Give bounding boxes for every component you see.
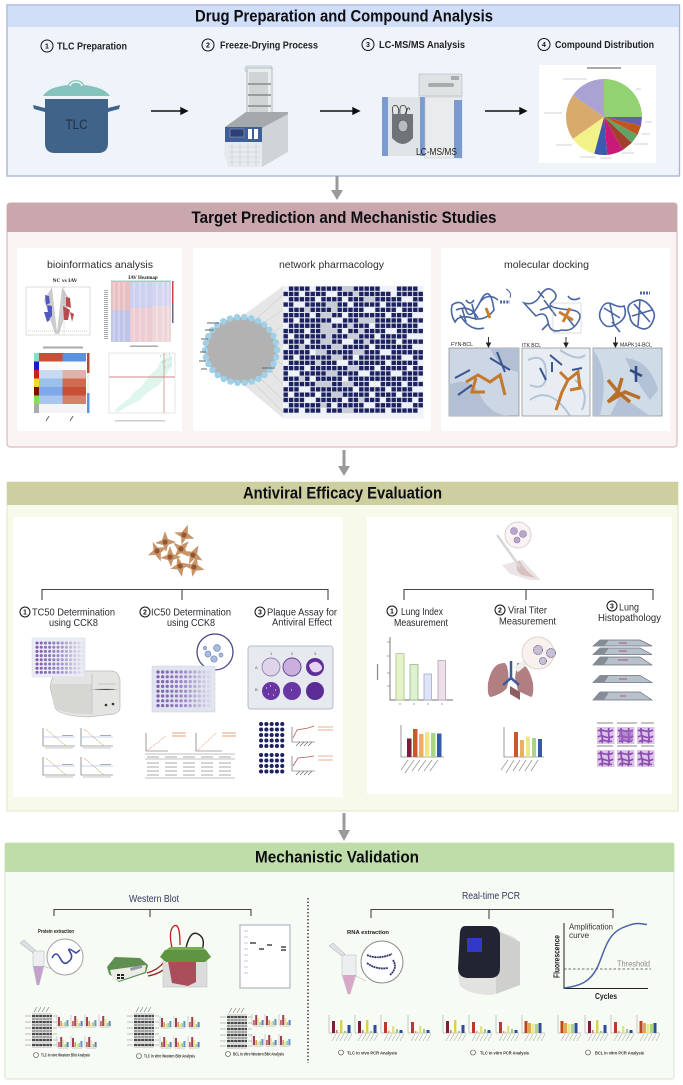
real-time PCR heading: Real-time PCR [462,891,520,902]
dotted divider [307,898,309,1063]
panel: target prediction and mechanistic studies [7,203,677,447]
label: viral titer [495,604,556,628]
card: molecular docking [441,248,670,431]
arrow: flow to antiviral efficacy [338,450,350,476]
step 4 label: Compound Distribution [555,40,654,51]
label: viral titer: Measurement [499,616,556,628]
bar chart: viral titer by group [501,727,544,773]
label: TC50: using CCK8 [49,617,98,629]
label: TC50: TC50 Determination [32,606,115,618]
volcano plot: NC vs IAV [53,278,78,284]
PCR group 3 [558,1015,660,1056]
heading: mechanistic validation: Mechanistic Validation [255,848,419,866]
protein extraction label: Protein extraction [38,929,74,935]
step 4 label [538,38,654,51]
step 3 label: 3 [366,42,370,49]
label: plaque assay [255,606,337,628]
icon: microplate reader [32,638,120,717]
label: IC50 [140,606,231,629]
docking arrows [486,337,618,347]
western blot heading: Western Blot [129,894,179,905]
chart: amplification curve: Fluorescence [552,935,562,978]
heading: target prediction: Target Prediction and Mechanistic Studies [192,209,496,227]
icon: plaque assay plate: 3 [314,651,317,656]
panel: mechanistic validation [5,843,674,1079]
PCR group 1 [329,1015,431,1056]
card: molecular docking: MAPK14-BCL [620,342,652,348]
bracket [371,910,613,919]
icon: plaque assay plate: 1 [270,651,273,656]
step 1 label [41,40,127,52]
bracket [404,590,653,600]
heatmap: IAV Heatmap [128,276,158,281]
step 2 label [202,39,318,52]
icon: electrophoresis power supply and tank [107,925,211,987]
PCR group 2: TLC in vitro PCR Analysis [480,1050,530,1056]
step 3 label: LC-MS/MS Analysis [379,40,465,51]
icon: lungs with virus inset [488,637,556,700]
PCR group 1: TLC in vivo PCR Analysis [347,1050,398,1056]
icon: protein tube [20,939,83,985]
western blot group 2: TLC in vitro Western Blot Analysis [144,1054,195,1058]
subheading: molecular docking [504,259,589,271]
plaque dot plates and dose curves [261,724,333,775]
label: lung index: Lung Index [401,606,444,618]
histology micrographs [597,723,654,767]
protein structure: FYN-BCL [451,289,510,329]
protein structure: MAPK14-BCL [600,293,654,332]
module-trait heatmap [34,346,90,421]
label: IC50: using CCK8 [167,617,215,629]
docking labels: FYN-BCL [451,342,473,348]
PCR group 2 [443,1015,545,1056]
western blot group 3: BCL in vitro Western Blot Analysis [233,1052,284,1056]
step 1 label: TLC Preparation [57,42,127,52]
pie chart: compound distribution [539,65,656,163]
bar chart: lung index by group [401,725,444,773]
TC50 line charts [43,728,113,777]
heading: drug preparation: Drug Preparation and Compound Analysis [195,8,493,26]
subheading: bioinformatics analysis [47,259,153,271]
label: TC50 [20,606,115,629]
arrow [485,108,526,114]
label: plaque assay: Plaque Assay for [267,606,337,618]
label: viral titer: Viral Titer [508,604,547,616]
RNA extraction label: RNA extraction [347,930,390,936]
icon: plaque assay plate: A [255,665,258,670]
card: in vitro assays [13,517,343,797]
arrow: flow to target prediction [331,176,343,200]
docking close-up: MAPK14-BCL [593,348,662,416]
arrow: flow to mechanistic validation [338,813,350,841]
icon: PCR machine [458,926,520,995]
icon: plaque assay plate [248,646,333,709]
icon: freeze dryer [224,66,288,167]
card: bioinformatics analysis [17,248,182,431]
panel: antiviral efficacy evaluation [7,482,678,811]
network fan and ring [199,286,283,418]
chart: amplification curve: Amplification [569,922,613,932]
icon: LC-MS/MS instrument: LC-MS/MS [416,147,457,158]
icon: RNA tube [329,941,403,994]
arrow [151,108,187,114]
chart: amplification curve: Threshold [617,960,650,968]
icon: cultured cells [144,521,208,580]
western blot group 3 [220,1008,291,1056]
card: network pharmacology [193,248,431,431]
label: lung index [387,606,448,629]
bar chart: lung index [378,637,453,704]
scatter plot [109,346,175,422]
label: viral titer: 2 [498,608,502,614]
step 2 label: 2 [206,42,210,50]
label: lung index: Measurement [394,617,448,629]
card: molecular docking: ITK BCL [522,343,541,349]
label: lung histopathology: 3 [610,604,614,610]
label: lung histopathology: Histopathology [598,612,662,624]
icon: plaque assay plate: 2 [291,651,294,656]
western blot group 1: TLC in vivo Western Blot Analysis [41,1052,90,1058]
PCR group 3: BCL in vitro PCR Analysis [595,1050,644,1056]
label: plaque assay: 3 [258,610,262,616]
icon: LC-MS/MS instrument [382,74,462,158]
chart: amplification curve: Cycles [595,992,617,1001]
icon: plaque assay plate: B [255,687,258,692]
step 3 label [362,38,465,51]
docking close-up: ITK-BCL [522,348,590,416]
step 4 label: 4 [542,42,546,49]
bracket [54,910,251,917]
subheading: network pharmacology [279,259,385,271]
western blot group 1 [25,1007,111,1058]
icon: TLC pot [33,80,120,153]
label: lung histopathology [598,601,662,624]
protein structure: ITK-BCL [524,289,581,333]
docking close-up: FYN-BCL [449,348,519,416]
western blot group 2 [127,1007,200,1058]
volcano plot [26,278,90,335]
heatmap [106,276,174,342]
step 2 label: Freeze-Drying Process [220,40,318,52]
icon: lung sampling with virus inset [497,522,541,580]
step 1 label: 1 [45,44,49,50]
chart: amplification curve [552,922,651,1001]
card: in vivo assays [367,517,672,794]
label: IC50: 2 [143,610,147,616]
label: lung histopathology: Lung [619,602,639,614]
arrow [320,108,359,114]
icon: TLC pot: TLC [66,116,88,132]
chart: amplification curve: curve [569,931,590,940]
icon: membrane blot [240,925,290,988]
icon: microplate with magnified well [152,634,233,712]
label: TC50: 1 [23,610,27,616]
icon: histology slides [593,640,652,700]
label: IC50: IC50 Determination [151,606,231,618]
panel: drug preparation and compound analysis [7,5,680,176]
IC50 charts and table [145,733,236,778]
label: lung index: 1 [390,608,394,616]
label: plaque assay: Antiviral Effect [272,616,332,628]
bracket [42,590,328,600]
heading: antiviral efficacy: Antiviral Efficacy Evaluation [243,484,442,502]
target-compound matrix [283,286,423,418]
